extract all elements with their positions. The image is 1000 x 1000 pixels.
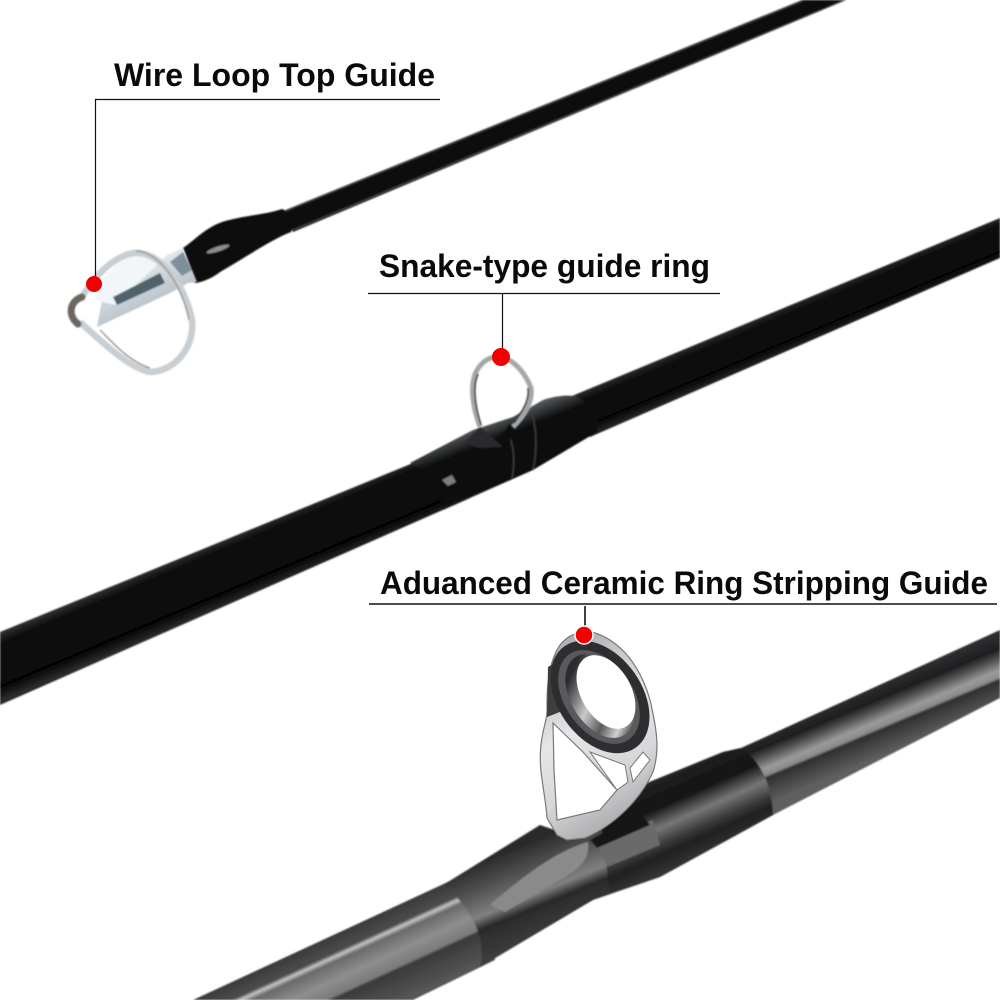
icon: snake-type guide ring xyxy=(465,357,531,448)
rod: bottom section xyxy=(193,630,1000,1000)
heading: ceramic: Aduanced Ceramic Ring Stripping Guide xyxy=(380,565,988,601)
label: ceramic ring stripping guide xyxy=(369,565,997,644)
rod: middle section with snake guide xyxy=(0,218,1000,705)
heading: snake-type: Snake-type guide ring xyxy=(379,248,710,284)
label: snake-type guide ring xyxy=(368,248,720,366)
heading: wire loop: Wire Loop Top Guide xyxy=(114,57,435,93)
rod: top thin tip section xyxy=(183,0,846,283)
label: wire loop top guide xyxy=(86,57,440,292)
icon: ceramic ring stripping guide xyxy=(530,622,670,840)
icon: wire loop top guide xyxy=(71,248,197,372)
